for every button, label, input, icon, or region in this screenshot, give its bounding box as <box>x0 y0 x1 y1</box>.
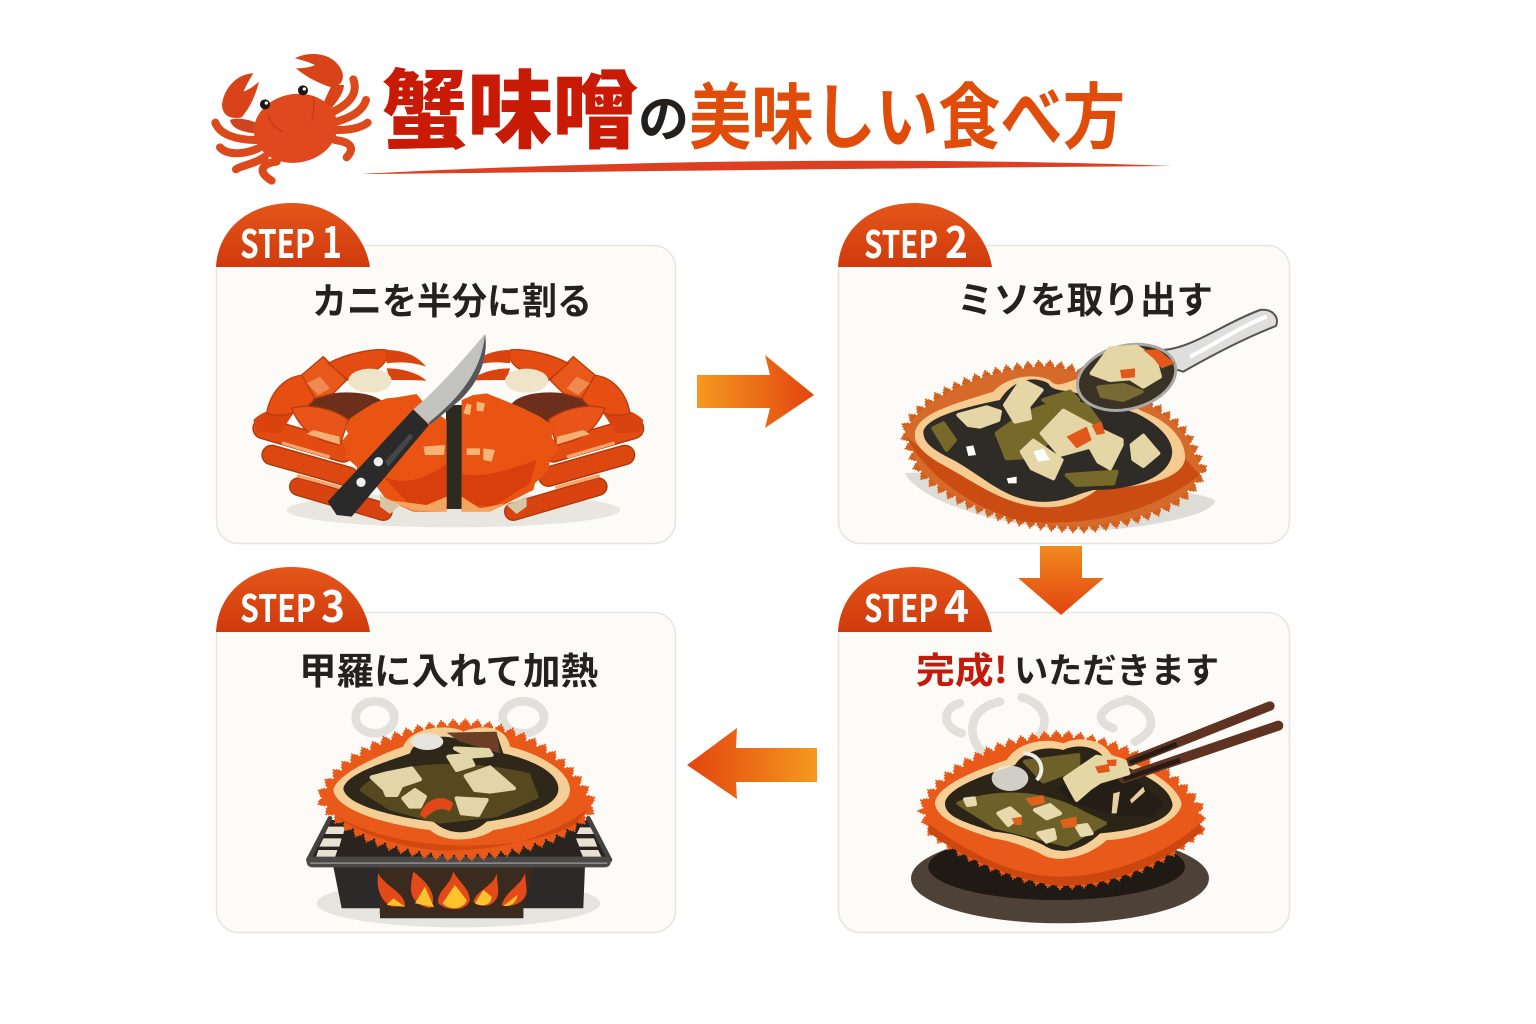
step 4 heading: 完成! <box>916 642 1008 694</box>
step 4 heading: いただきます <box>1014 643 1219 694</box>
illustration: shell on charcoal grill <box>307 701 611 927</box>
badge: step 1: STEP <box>240 214 315 270</box>
title underline <box>362 161 1172 174</box>
badge: step 2: STEP <box>864 214 938 269</box>
panel: step 1 <box>216 203 676 544</box>
badge: step 1 <box>216 203 370 271</box>
step 3 heading: 甲羅に入れて加熱 <box>299 641 598 695</box>
badge: step 4: 4 <box>944 573 969 635</box>
arrow: step 4 to step 3 <box>687 728 817 799</box>
badge: step 4 <box>838 567 992 635</box>
badge: step 2 <box>838 203 992 271</box>
badge: step 3 <box>216 567 370 635</box>
panel: step 4 <box>838 567 1290 932</box>
step 2 heading: ミソを取り出す <box>957 270 1213 324</box>
arrow: step 1 to step 2 <box>697 355 814 428</box>
step 4 heading <box>916 642 1219 694</box>
badge: step 1: 1 <box>322 209 342 271</box>
panel: step 2 <box>838 203 1290 544</box>
title: 美味しい食べ方 <box>689 59 1125 164</box>
title <box>382 41 1125 166</box>
step 1 heading: カニを半分に割る <box>312 271 592 325</box>
arrow: step 2 to step 4 <box>1018 546 1104 615</box>
badge: step 2: 2 <box>945 209 968 271</box>
illustration: finished dish with chopsticks <box>911 697 1278 923</box>
badge: step 3: 3 <box>321 573 345 635</box>
title: 蟹味噌 <box>382 41 638 166</box>
badge: step 4: STEP <box>864 578 938 633</box>
panel: step 3 <box>216 567 676 932</box>
card 4 background <box>838 612 1290 932</box>
card 1 background <box>216 246 676 544</box>
title: の <box>638 78 689 152</box>
card 3 background <box>216 612 676 932</box>
illustration: crab shell and spoon <box>905 310 1277 530</box>
icon: title crab <box>215 54 368 181</box>
card 2 background <box>838 246 1290 544</box>
badge: step 3: STEP <box>240 578 316 633</box>
illustration: crab cut in half with knife <box>253 334 643 527</box>
